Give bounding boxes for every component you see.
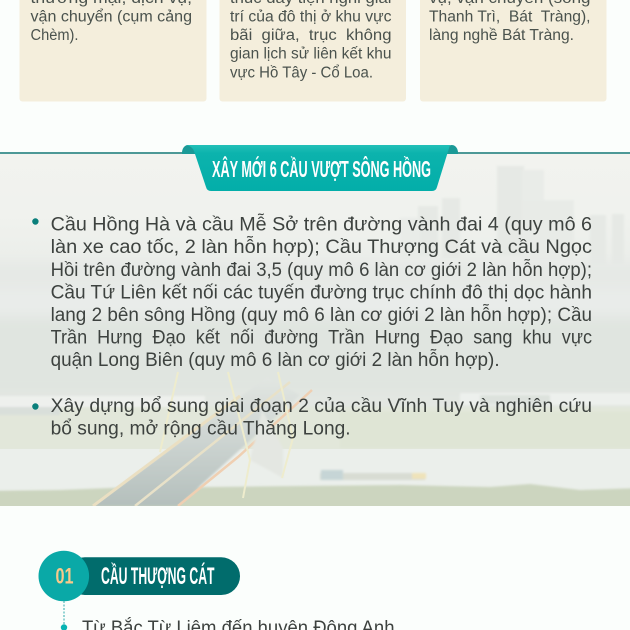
middle card text: [230, 0, 392, 81]
bridge deck: [93, 372, 312, 506]
upper river strip: [0, 393, 630, 450]
right card text: làng nghề Bát Tràng.: [429, 27, 574, 44]
bridge name: CẦU THƯỢNG CÁT: [101, 562, 215, 590]
bullet: six bridges: Cầu Hồng Hà và cầu Mễ Sở trên đường vành đai 4 (quy mô 6: [51, 214, 592, 236]
bullet list: [32, 214, 592, 440]
bullet: six bridges: làn xe cao tốc, 2 làn hỗn hợp); Cầu Thượng Cát và cầu Ngọc: [51, 236, 592, 258]
middle card text: gian lịch sử liên kết khu: [230, 46, 392, 63]
bullet: Vĩnh Tuy and Thăng Long: Xây dựng bổ sung giai đoạn 2 của cầu Vĩnh Tuy và nghiên cứu: [51, 396, 592, 417]
skyline buildings: [420, 166, 622, 232]
left card text: [30, 0, 192, 44]
right card text: Thanh Trì, Bát Tràng),: [429, 8, 590, 26]
right card text: [429, 0, 590, 44]
connector line: [63, 601, 65, 625]
banner: xây mới 6 cầu vượt sông Hồng: [182, 145, 458, 191]
bullet: Vĩnh Tuy and Thăng Long: [32, 396, 592, 440]
number 01: 01: [56, 564, 74, 588]
bullet: six bridges: Hồi trên đường vành đai 3,5 (quy mô 6 làn cơ giới 2 làn hỗn hợp);: [51, 259, 592, 281]
bullet: Vĩnh Tuy and Thăng Long: bổ sung, mở rộng cầu Thăng Long.: [51, 419, 351, 440]
left card text: vận chuyển (cụm cảng: [30, 8, 192, 26]
bullet: six bridges: lang 2 bên sông Hồng (quy mô 6 làn cơ giới 2 làn hỗn hợp); Cầu: [51, 304, 592, 326]
tree line: [0, 483, 630, 506]
heading: 01 Cầu Thượng Cát: [38, 551, 240, 601]
bullet: six bridges: Cầu Tứ Liên kết nối các tuyến đường trục chính đô thị dọc hành: [51, 282, 592, 303]
panel: right card: [420, 0, 606, 102]
river: [0, 449, 630, 491]
barge: [320, 470, 426, 480]
section divider line: [0, 152, 630, 154]
distant land: [0, 262, 630, 392]
middle card text: vực Hồ Tây - Cổ Loa.: [230, 64, 373, 81]
bullet: six bridges: [32, 214, 592, 371]
left card text: Chèm).: [30, 27, 78, 44]
panel: middle card: [220, 0, 406, 102]
panel: bridge photo background: [0, 153, 630, 520]
banner title: XÂY MỚI 6 CẦU VƯỢT SÔNG HỒNG: [212, 155, 431, 182]
bullet: six bridges: Trần Hưng Đạo kết nối đường Trần Hưng Đạo sang khu vực: [51, 328, 592, 349]
panel: left card: [20, 0, 206, 102]
middle card text: trí của đô thị ở khu vực: [230, 8, 392, 26]
middle card text: bãi giữa, trục không: [230, 27, 392, 44]
bullet: six bridges: quận Long Biên (quy mô 6 làn cơ giới 2 làn hỗn hợp).: [51, 349, 500, 371]
